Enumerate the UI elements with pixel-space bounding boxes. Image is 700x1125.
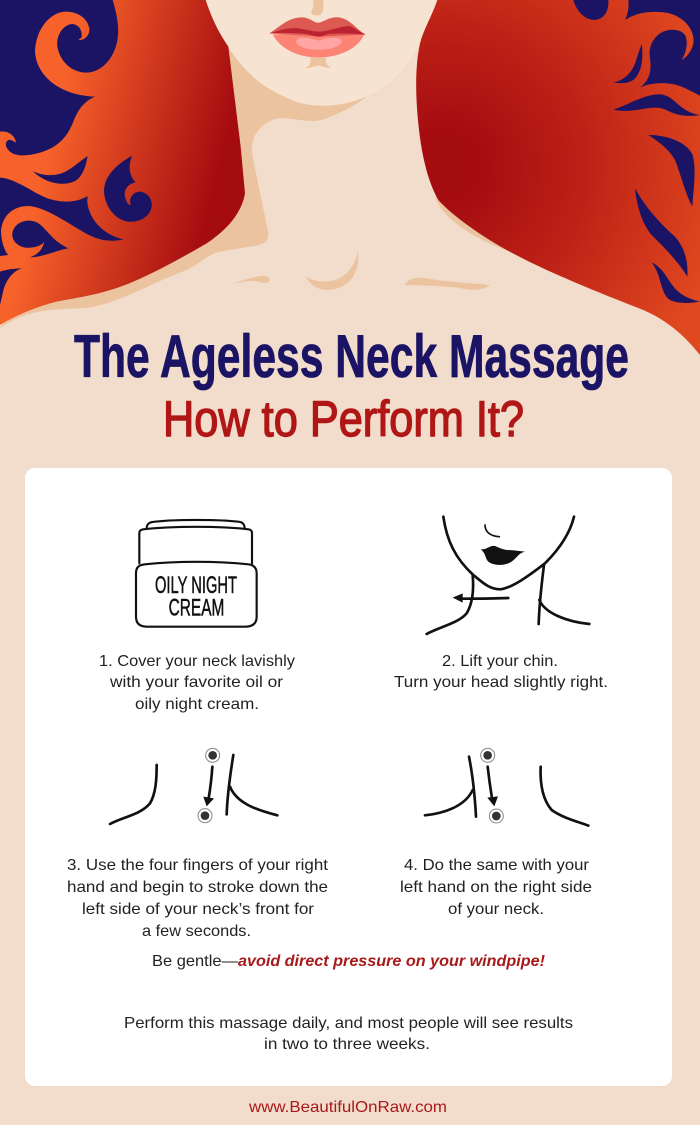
illustration: collarbone marks (230, 250, 490, 290)
text: results note: Perform this massage daily, and most people will see results (124, 1015, 573, 1032)
icon: lips (269, 17, 366, 68)
illustration: right hair (416, 0, 700, 355)
icon: night cream jar (136, 520, 257, 627)
text: results note: in two to three weeks. (264, 1036, 430, 1053)
text: step 3: left side of your neck’s front for (82, 901, 315, 918)
text: step 4: left hand on the right side (400, 879, 592, 896)
text: step 3: 3. Use the four fingers of your right (67, 857, 329, 874)
callout: be gentle warning: Be gentle— (152, 953, 238, 970)
hair swirl: navy wave (0, 178, 123, 256)
hair swirl: navy bottom (0, 268, 22, 305)
footer url: www.BeautifulOnRaw.com (248, 1099, 447, 1116)
illustration: neck shadow (0, 0, 400, 328)
icon: right neck massage (425, 748, 588, 826)
hair swirl: navy top right (625, 0, 700, 96)
text: step 1: oily night cream. (135, 696, 259, 713)
illustration: face (205, 0, 438, 106)
icon: left neck massage (110, 748, 277, 824)
subtitle: How to Perform It? (163, 391, 524, 447)
hair swirl: navy top ellipse (573, 0, 608, 20)
text: step 2 (394, 653, 608, 691)
hair swirl: navy teardrop (104, 156, 152, 222)
hair swirl: navy leaf 1 (613, 44, 642, 83)
text: step 1: 1. Cover your neck lavishly (99, 653, 295, 670)
hair swirl: navy leaf (33, 156, 88, 184)
text: step 1: with your favorite oil or (109, 674, 284, 691)
text: step 3: hand and begin to stroke down the (67, 879, 328, 896)
text: step 3: a few seconds. (142, 923, 251, 940)
hair swirl: navy leaf 3 (635, 188, 687, 277)
hair swirl: navy wave (613, 94, 700, 116)
text: step 4: of your neck. (448, 901, 544, 918)
icon: lifted chin with arrow (427, 517, 589, 634)
text: step 3 (67, 857, 329, 940)
hair swirl: navy top left (0, 0, 118, 155)
text: step 2: Turn your head slightly right. (394, 674, 608, 691)
hair swirl: navy leaf 4 (652, 262, 700, 303)
icon: night cream jar: CREAM (169, 595, 224, 622)
text: step 4 (400, 857, 592, 918)
icon: nose (311, 0, 324, 15)
panel: instructions card (25, 468, 672, 1086)
text: results note (124, 1015, 573, 1053)
text: step 4: 4. Do the same with your (404, 857, 590, 874)
hair swirl: navy leaf 2 (648, 135, 695, 207)
text: step 2: 2. Lift your chin. (442, 653, 558, 670)
callout: be gentle warning: avoid direct pressure on your windpipe! (238, 953, 546, 970)
hair swirl: navy eye (12, 221, 68, 257)
icon: night cream jar: OILY NIGHT (155, 572, 237, 599)
text: step 1 (99, 653, 295, 713)
illustration: left hair (0, 0, 245, 325)
